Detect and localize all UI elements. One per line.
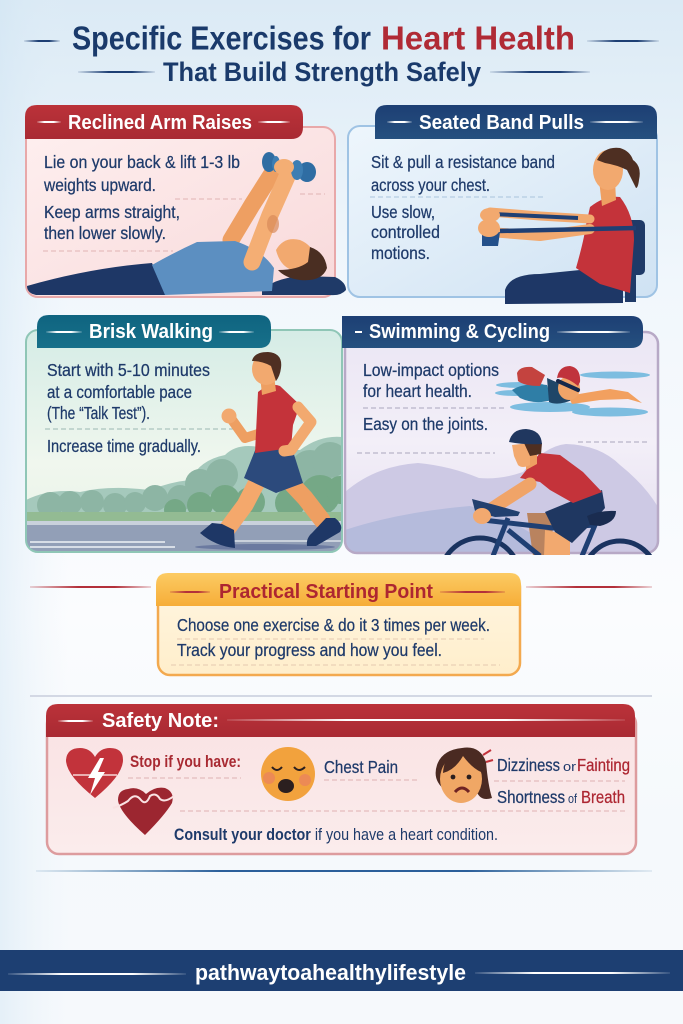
text: practical steps: Choose one exercise & do it 3 times per week. bbox=[177, 615, 490, 635]
divider: below safety note bbox=[36, 870, 652, 872]
text: walking instructions bbox=[45, 360, 233, 456]
heading: safety note bbox=[46, 704, 635, 737]
text: consult your doctor: Consult your doctor if you have a heart condition. bbox=[174, 825, 498, 844]
text: band pull instructions: Use slow, bbox=[371, 202, 435, 222]
divider: above safety note bbox=[30, 695, 652, 697]
heading: brisk walking: Brisk Walking bbox=[89, 321, 213, 343]
text: stop if you have: Stop if you have: bbox=[130, 752, 241, 771]
text: swimming and cycling notes: Easy on the joints. bbox=[363, 414, 488, 434]
text: shortness of breath: Breath bbox=[581, 787, 625, 807]
text: band pull instructions bbox=[370, 152, 555, 263]
panel: swimming and cycling bbox=[342, 316, 660, 555]
title: That Build Strength Safely bbox=[163, 57, 481, 87]
text: walking instructions: Increase time gradually. bbox=[47, 436, 201, 456]
text: shortness of breath: of bbox=[568, 791, 577, 806]
heading: swimming and cycling bbox=[342, 316, 643, 348]
text: shortness of breath: Shortness bbox=[497, 787, 565, 807]
panel: reclined arm raises bbox=[25, 105, 346, 297]
panel: brisk walking bbox=[26, 315, 354, 555]
panel: practical starting point bbox=[156, 573, 521, 675]
text: dizziness or fainting: Fainting bbox=[577, 755, 630, 775]
illustration: walking man bbox=[200, 352, 341, 548]
text: band pull instructions: across your chest. bbox=[371, 175, 490, 195]
footer banner bbox=[0, 950, 683, 991]
heading: reclined arm raises bbox=[25, 105, 303, 139]
text: chest pain: Chest Pain bbox=[324, 757, 398, 777]
text: dizziness or fainting: or bbox=[563, 759, 577, 774]
illustration: park background and road bbox=[26, 437, 354, 555]
title: Heart Health bbox=[381, 20, 575, 56]
illustration: cyclist bbox=[444, 429, 652, 555]
heading: practical starting point: Practical Starting Point bbox=[219, 581, 433, 603]
text: band pull instructions: controlled bbox=[371, 222, 440, 242]
text: walking instructions: at a comfortable pace bbox=[47, 382, 192, 402]
heading: brisk walking bbox=[37, 315, 271, 348]
heading: safety note: Safety Note: bbox=[102, 709, 219, 732]
icon: dizzy woman bbox=[436, 748, 493, 803]
panel: safety note bbox=[46, 704, 636, 854]
divider: practical left bbox=[30, 586, 151, 588]
text: reclined arm instructions bbox=[43, 152, 325, 251]
heading: reclined arm raises: Reclined Arm Raises bbox=[68, 112, 252, 134]
text: reclined arm instructions: Lie on your back & lift 1-3 lb bbox=[44, 152, 240, 172]
title: Specific Exercises for bbox=[72, 20, 371, 56]
icon: heart with lightning bolt bbox=[66, 748, 123, 798]
title bbox=[24, 20, 659, 87]
text: reclined arm instructions: then lower slowly. bbox=[44, 223, 166, 243]
text: band pull instructions: Sit & pull a resistance band bbox=[371, 152, 555, 172]
text: walking instructions: (The “Talk Test”). bbox=[47, 403, 150, 423]
illustration: person lifting dumbbells bbox=[27, 152, 346, 295]
text: reclined arm instructions: Keep arms straight, bbox=[44, 202, 180, 222]
footer banner: pathwaytoahealthylifestyle bbox=[195, 960, 466, 985]
heading: swimming and cycling: Swimming & Cycling bbox=[369, 321, 550, 343]
illustration: hills bbox=[345, 444, 658, 560]
text: swimming and cycling notes: Low-impact options bbox=[363, 360, 499, 380]
illustration: woman with resistance band bbox=[478, 148, 645, 304]
divider: practical right bbox=[526, 586, 652, 588]
heading: seated band pulls bbox=[375, 105, 657, 139]
icon: face in pain bbox=[261, 747, 315, 801]
text: swimming and cycling notes: for heart health. bbox=[363, 381, 472, 401]
panel: seated band pulls bbox=[348, 105, 657, 304]
text: band pull instructions: motions. bbox=[371, 243, 430, 263]
text: dizziness or fainting: Dizziness bbox=[497, 755, 560, 775]
text: dizziness or fainting bbox=[497, 755, 630, 775]
text: walking instructions: Start with 5-10 minutes bbox=[47, 360, 210, 380]
heading: seated band pulls: Seated Band Pulls bbox=[419, 112, 584, 134]
icon: heart with pulse bbox=[113, 788, 174, 835]
text: shortness of breath bbox=[497, 787, 625, 807]
text: reclined arm instructions: weights upward. bbox=[43, 175, 156, 195]
heading: practical starting point bbox=[156, 573, 521, 606]
text: swimming and cycling notes bbox=[357, 360, 650, 453]
text: practical steps: Track your progress and how you feel. bbox=[177, 640, 442, 660]
illustration: swimmer bbox=[495, 366, 650, 416]
text: practical steps bbox=[171, 615, 500, 665]
